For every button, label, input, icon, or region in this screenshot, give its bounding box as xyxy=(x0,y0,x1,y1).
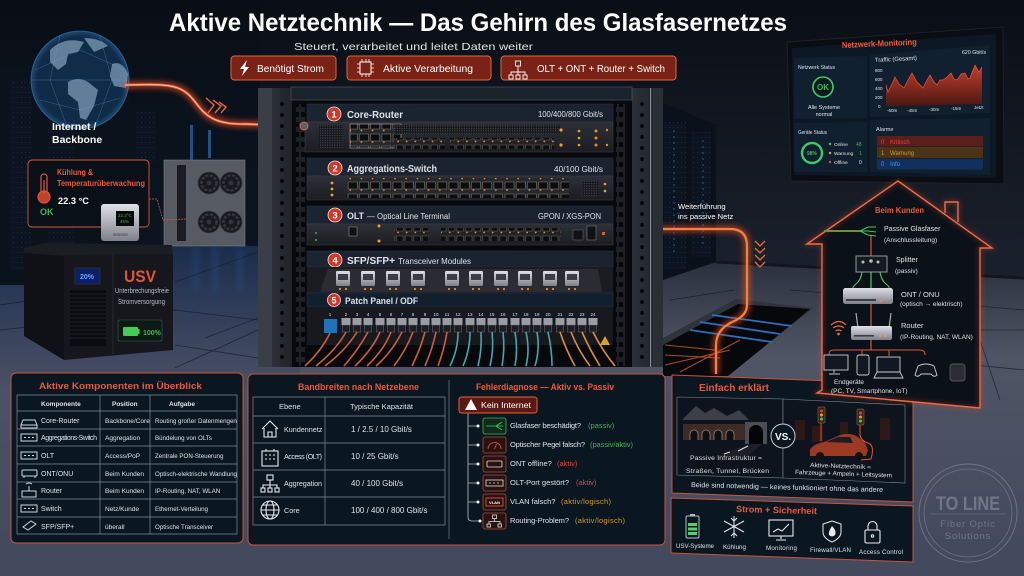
table: components: Zentrale PON-Steuerung xyxy=(155,453,224,460)
monitor panel: Traffic chart: -45m xyxy=(907,108,918,113)
rack unit 5: Patch Panel / ODF: 5 xyxy=(331,296,337,306)
fibre and feed line xyxy=(824,227,925,356)
diagnosis classes: (aktiv) xyxy=(557,459,578,468)
rack unit 2: Aggregations-Switch: Aggregations-Switch xyxy=(347,164,437,175)
patch port numbers: 14 xyxy=(478,312,484,317)
patch port numbers: 7 xyxy=(401,312,404,317)
table: bandwidths: 40 / 100 Gbit/s xyxy=(351,479,403,488)
icon: temperature sensor: SENSOR xyxy=(113,233,128,237)
VS badge xyxy=(771,424,795,448)
patch port numbers: 8 xyxy=(412,312,415,317)
icon: snowflake xyxy=(724,516,744,538)
patch port numbers: 9 xyxy=(424,312,427,317)
monitor panel: Alarme: 0 xyxy=(881,140,885,146)
patch port numbers: 11 xyxy=(445,312,450,317)
text: Endgeräte: Endgeräte xyxy=(834,379,864,386)
rack unit 3: OLT: — Optical Line Terminal xyxy=(367,212,450,221)
label: Internet / Backbone: Backbone xyxy=(52,134,102,146)
rack unit 5: Patch Panel / ODF xyxy=(305,293,615,366)
monitor panel: Alarme: 0 xyxy=(881,162,885,168)
table: bandwidths: Aggregation xyxy=(284,479,322,488)
heading: Fehlerdiagnose: Fehlerdiagnose — Aktiv vs. Passiv xyxy=(476,382,614,392)
table: components: Router xyxy=(41,488,63,495)
rack unit 3: OLT xyxy=(307,206,613,245)
tree: Kein Internet: Kein Internet xyxy=(481,401,532,410)
badge: Aktive Verarbeitung xyxy=(347,56,491,80)
patch port numbers: 4 xyxy=(367,312,370,317)
diagnosis questions: Optischer Pegel falsch? xyxy=(510,440,585,449)
monitor panel: Netzwerk Status: Netzwerk Status xyxy=(798,65,835,71)
diagnosis classes: (passiv) xyxy=(588,421,615,430)
panel: Strom + Sicherheit xyxy=(671,498,913,562)
bandwidth icons xyxy=(261,421,279,519)
ONT device xyxy=(843,288,893,304)
monitor panel: Traffic chart: Traffic (Gesamt) xyxy=(875,56,917,64)
panel: Einfach erklärt: Einfach erklärt xyxy=(699,383,770,394)
watermark: TO LINE xyxy=(919,464,1017,562)
patch port numbers: 21 xyxy=(557,312,563,317)
USV unit: Unterbrechungsfreie xyxy=(115,288,169,295)
table: components: SFP/SFP+ xyxy=(41,524,74,531)
monitor panel: Netzwerk Status xyxy=(794,56,867,119)
monitor panel: Geräte Status: Warnung xyxy=(834,151,854,157)
monitor panel: Geräte Status: 1 xyxy=(859,151,862,157)
table: bandwidths: Core xyxy=(284,506,300,515)
monitor panel: Traffic chart: 620 Gbit/s xyxy=(962,50,986,56)
table: bandwidths: Typische Kapazität xyxy=(350,402,414,411)
monitor panel: Traffic chart: 200 xyxy=(875,95,883,100)
icon: battery xyxy=(686,514,699,538)
monitor title: Netzwerk-Monitoring xyxy=(842,37,917,50)
icon: temperature sensor xyxy=(101,204,139,241)
panel: Einfach erklärt xyxy=(672,375,913,502)
table: components: Beim Kunden xyxy=(105,488,144,495)
router device xyxy=(851,313,892,340)
label: Weiterführung ins passive Netz: ins passive Netz xyxy=(678,212,733,221)
table: components: Aggregation xyxy=(105,435,140,442)
label: Internet / Backbone: Internet / xyxy=(52,121,96,133)
USV unit: Stromversorgung xyxy=(118,299,165,306)
USV unit: 20% xyxy=(80,274,95,281)
USV unit xyxy=(24,243,173,360)
monitor panel: Geräte Status: 48 xyxy=(856,142,862,148)
end devices xyxy=(824,355,965,381)
patch panel warning icon xyxy=(600,336,610,345)
table: bandwidths: Kundennetz xyxy=(284,425,323,434)
security labels: Kühlung xyxy=(723,544,747,551)
monitor panel: Alarme: Info xyxy=(890,162,901,168)
monitor panel: Traffic chart: Jetzt xyxy=(974,105,984,110)
table: components xyxy=(17,395,238,534)
rack unit 2: Aggregations-Switch: 2 xyxy=(332,164,338,174)
table: bandwidths: Ebene xyxy=(279,402,301,411)
monitor panel: Netzwerk Status: normal xyxy=(816,112,832,118)
table: components: ONT/ONU xyxy=(41,471,73,478)
monitor panel: Traffic chart: 600 xyxy=(875,77,883,82)
fibre connector on router xyxy=(300,122,308,130)
arrow: fibre to passive network xyxy=(645,229,765,374)
watermark: TO LINE: TO LINE xyxy=(936,494,1000,515)
table: components: Optisch-elektrische Wandlung xyxy=(155,471,238,478)
air conditioning unit xyxy=(164,160,245,246)
panel: Kühlung und Temperaturüberwachung: OK xyxy=(40,207,54,217)
table: bandwidths: 100 / 400 / 800 Gbit/s xyxy=(351,506,428,515)
panel: Aktive Komponenten im Überblick xyxy=(11,373,243,543)
patch port numbers: 20 xyxy=(545,312,551,317)
rack unit 2: Aggregations-Switch xyxy=(307,158,613,200)
monitor panel: Alarme: 1 xyxy=(881,151,885,157)
icon: shield firewall xyxy=(823,521,841,542)
icon: monitor chart xyxy=(769,520,793,540)
table: bandwidths xyxy=(253,397,445,525)
patch port numbers: 15 xyxy=(489,312,495,317)
badge: OLT + ONT + Router + Switch xyxy=(501,56,676,80)
panel: Kühlung und Temperaturüberwachung: Temperaturüberwachung xyxy=(57,178,145,188)
summary text: Beide sind notwendig — keines funktioniert ohne das andere xyxy=(691,482,883,494)
USV unit: 100% xyxy=(143,330,162,337)
watermark: TO LINE: Solutions xyxy=(945,531,991,542)
diagnosis questions: OLT-Port gestört? xyxy=(510,478,569,487)
house: Beim Kunden: Beim Kunden xyxy=(875,206,924,215)
rack unit 3: OLT: OLT xyxy=(347,211,364,222)
monitor panel: Traffic chart: -30m xyxy=(929,107,940,112)
rack unit 1: Core-Router: Core-Router xyxy=(347,110,403,121)
panel: Bandbreiten and Fehlerdiagnose xyxy=(248,374,665,545)
table: bandwidths: 10 / 25 Gbit/s xyxy=(351,452,399,461)
patch port numbers: 12 xyxy=(455,312,461,317)
monitor panel: Netzwerk Status: Alle Systeme xyxy=(808,105,840,111)
monitor panel: Traffic chart xyxy=(870,45,990,117)
icon: temperature sensor: 22.3°C xyxy=(118,213,133,218)
patch port numbers: 17 xyxy=(512,312,518,317)
subtitle: Steuert, verarbeitet und leitet Daten weiter xyxy=(294,41,534,53)
text: Endgeräte: (PC, TV, Smartphone, IoT) xyxy=(831,388,908,395)
diagnosis classes: (aktiv/logisch) xyxy=(561,497,612,506)
patch port numbers: 6 xyxy=(390,312,393,317)
rack unit 1: Core-Router: 1 xyxy=(331,110,337,120)
monitor panel: Geräte Status: 0 xyxy=(859,160,862,166)
rack unit 4: SFP modules: 4 xyxy=(332,256,338,266)
patch port numbers: 3 xyxy=(356,312,359,317)
text: Router: (IP-Routing, NAT, WLAN) xyxy=(900,334,973,341)
badge: Benötigt Strom xyxy=(231,56,336,80)
panel: Aktive Komponenten im Überblick: Aktive Komponenten im Überblick xyxy=(39,381,203,392)
illustration: passive infrastructure xyxy=(677,397,783,478)
rack unit 1: Core-Router: 100/400/800 Gbit/s xyxy=(538,110,603,119)
connector: sensor to cooling unit xyxy=(149,199,187,220)
text: ONT / ONU: (optisch → elektrisch) xyxy=(900,301,962,308)
table: components: OLT xyxy=(41,453,55,460)
diagnosis classes: (passiv/aktiv) xyxy=(590,440,634,449)
patch port numbers: 23 xyxy=(579,312,585,317)
monitor panel: Alarme xyxy=(870,118,990,175)
monitor panel: Traffic chart: -15m xyxy=(951,106,962,111)
house: Beim Kunden xyxy=(807,181,992,408)
monitor panel: Traffic chart: 0 xyxy=(878,104,881,109)
title: Aktive Netztechnik — Das Gehirn des Glasfasernetzes xyxy=(169,9,787,37)
patch port numbers: 19 xyxy=(534,312,540,317)
rack unit 2: Aggregations-Switch: 40/100 Gbit/s xyxy=(554,165,603,174)
security labels: Firewall/VLAN xyxy=(810,547,851,554)
badge: Benötigt Strom: Benötigt Strom xyxy=(257,64,324,75)
patch port numbers: 24 xyxy=(590,312,596,317)
illustration: passive infrastructure: Passive Infrastruktur = xyxy=(690,455,762,462)
security labels: Access Control xyxy=(859,549,903,556)
splitter xyxy=(856,256,887,272)
label: Weiterführung ins passive Netz: Weiterführung xyxy=(678,202,726,211)
text: Router: Router xyxy=(901,321,924,330)
text: Splitter: Splitter xyxy=(896,257,918,264)
patch port numbers: 16 xyxy=(500,312,506,317)
heading: Bandbreiten nach Netzebene: Bandbreiten nach Netzebene xyxy=(298,382,419,392)
VS badge: VS. xyxy=(775,432,791,443)
table: components: Access/PoP xyxy=(105,453,140,460)
panel: Kühlung und Temperaturüberwachung: 22.3 °C xyxy=(58,196,89,207)
patch port numbers: 2 xyxy=(345,312,348,317)
monitor panel: Alarme: Warnung xyxy=(890,151,914,157)
security labels: Monitoring xyxy=(766,545,798,552)
icon: thermometer xyxy=(38,174,50,203)
rack unit 3: OLT: GPON / XGS-PON xyxy=(538,212,601,221)
monitor panel: Geräte Status xyxy=(794,122,867,172)
table: components: Core-Router xyxy=(41,418,80,425)
patch port numbers: 22 xyxy=(568,312,574,317)
icon: wifi xyxy=(831,322,846,335)
USV unit: USV xyxy=(124,267,157,286)
icon: lock xyxy=(865,522,880,543)
monitor panel: Geräte Status: Offline xyxy=(834,160,848,166)
rack unit 4: SFP modules: Transceiver Modules xyxy=(398,257,471,266)
patch port numbers: 18 xyxy=(523,312,529,317)
illustration: passive infrastructure: Straßen, Tunnel, Brücken xyxy=(686,468,769,475)
patch cables xyxy=(305,332,615,366)
monitor panel: Alarme: Kritisch xyxy=(890,140,910,146)
diagnosis questions: VLAN falsch? xyxy=(510,497,555,506)
table: components: Ethernet-Verteilung xyxy=(155,506,209,513)
diagnosis icons xyxy=(483,418,506,529)
monitor panel: Geräte Status: 98% xyxy=(807,151,818,157)
table icons xyxy=(21,420,37,530)
diagnosis questions: ONT offline? xyxy=(510,459,552,468)
table: components: Bündelung von OLTs xyxy=(155,435,212,442)
monitoring screen xyxy=(787,27,1004,184)
badge: Aktive Verarbeitung: Aktive Verarbeitung xyxy=(383,64,473,75)
rack unit 4: SFP modules xyxy=(307,251,613,293)
monitor panel: Traffic chart: -60m xyxy=(887,108,898,113)
table: components: Switch xyxy=(41,506,62,513)
text: ONT / ONU: ONT / ONU xyxy=(901,290,940,299)
diagnosis questions: Routing-Problem? xyxy=(510,516,569,525)
illustration: active technology xyxy=(783,399,905,483)
text: Splitter: (passiv) xyxy=(895,268,918,275)
badge: OLT + ONT + Router + Switch: OLT + ONT + Router + Switch xyxy=(537,64,665,75)
rack unit 1: Core-Router xyxy=(305,104,613,152)
monitor panel: Geräte Status: Online xyxy=(834,142,848,148)
table: components: Aggregations-Switch xyxy=(41,435,97,442)
rack unit 5: Patch Panel / ODF: Patch Panel / ODF xyxy=(345,296,418,307)
text: Passive Glasfaser: (Anschlussleitung) xyxy=(884,237,937,244)
text: Passive Glasfaser: Passive Glasfaser xyxy=(884,226,941,233)
icon: temperature sensor: 45% xyxy=(120,219,129,224)
rack unit 3: OLT: 3 xyxy=(332,210,338,222)
table: components: Routing großer Datenmengen xyxy=(155,418,237,425)
rack unit 4: SFP modules: SFP/SFP+ xyxy=(347,256,395,267)
table: components: Beim Kunden xyxy=(105,471,144,478)
globe: Internet / Backbone xyxy=(31,31,129,129)
watermark: TO LINE: Fiber Optic xyxy=(940,519,996,530)
patch port numbers: 10 xyxy=(433,312,439,317)
table: components: überall xyxy=(105,524,125,531)
panel: Kühlung und Temperaturüberwachung xyxy=(28,160,149,227)
monitor panel: Netzwerk Status: OK xyxy=(817,83,829,92)
table: components: Netz/Kunde xyxy=(105,506,139,513)
table: components: IP-Routing, NAT, WLAN xyxy=(155,488,220,495)
table: bandwidths: Access (OLT) xyxy=(284,452,322,461)
monitor panel: Alarme: Alarme xyxy=(876,127,893,133)
panel: Kühlung und Temperaturüberwachung: Kühlung & xyxy=(57,167,93,177)
monitor panel: Geräte Status: Geräte Status xyxy=(798,130,827,136)
table: components: Backbone/Core xyxy=(105,418,150,425)
security labels: USV-Systeme xyxy=(676,543,715,550)
monitor panel: Traffic chart: 400 xyxy=(875,86,883,91)
panel: Strom + Sicherheit: Strom + Sicherheit xyxy=(736,504,817,516)
patch port numbers: 5 xyxy=(379,312,382,317)
table: components: Optische Transceiver xyxy=(155,524,213,531)
patch port numbers: 1 xyxy=(329,312,332,317)
illustration: active technology: Fahrzeuge + Ampeln + Leitsystem xyxy=(795,469,892,479)
diagnosis questions: Glasfaser beschädigt? xyxy=(510,421,581,430)
tree: Kein Internet xyxy=(459,397,634,529)
monitor panel: Traffic chart: 800 xyxy=(875,68,883,73)
rack xyxy=(258,87,663,367)
patch port numbers: 13 xyxy=(467,312,473,317)
floor opening with cables xyxy=(663,299,813,376)
diagnosis classes: (aktiv) xyxy=(576,478,597,487)
arrow: backbone fibre to core router xyxy=(125,85,310,126)
table: bandwidths: 1 / 2.5 / 10 Gbit/s xyxy=(351,425,412,434)
table: components: Position xyxy=(112,401,138,408)
diagnosis classes: (aktiv/logisch) xyxy=(575,516,626,525)
illustration: active technology: Aktive-Netztechnik = xyxy=(810,462,872,471)
table: components: Aufgabe xyxy=(169,401,195,408)
tree: Kein Internet: VLAN xyxy=(489,500,500,505)
table: components: Komponente xyxy=(41,401,81,408)
